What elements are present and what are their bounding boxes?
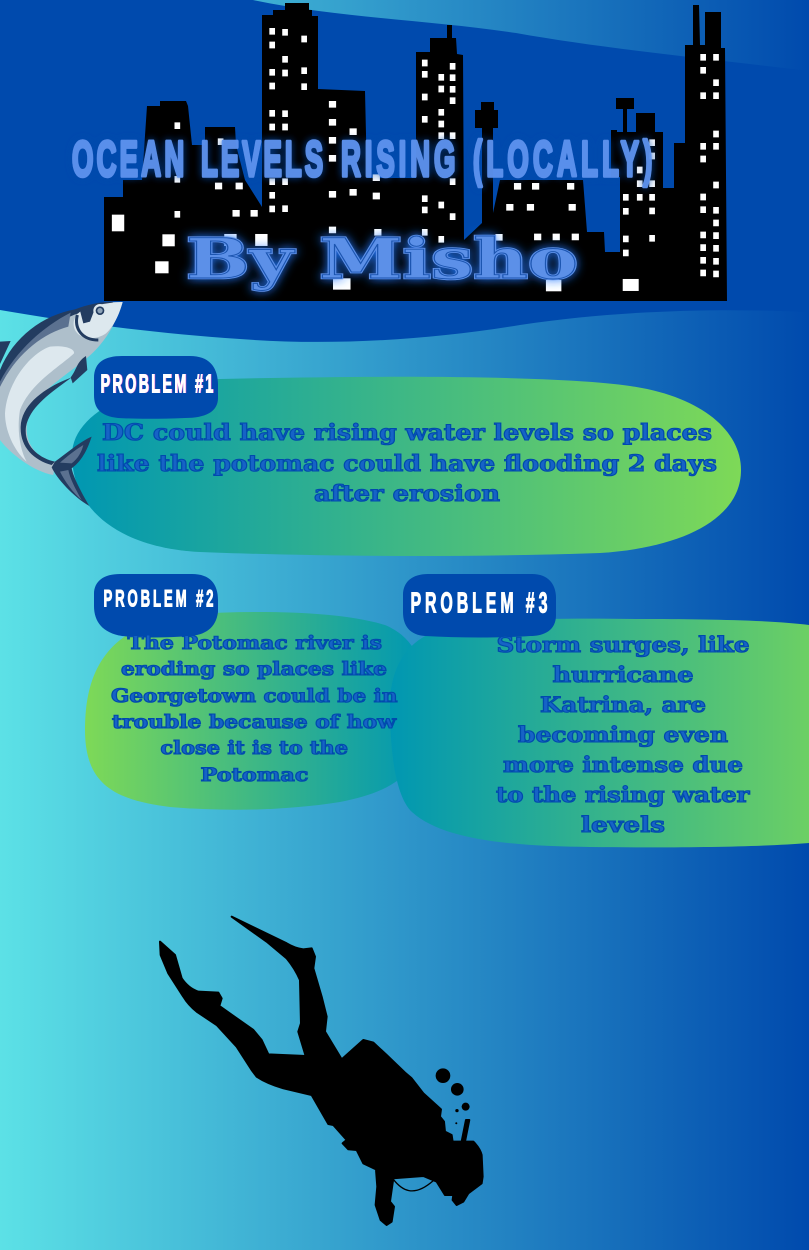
panel: problem 2 blob — [85, 612, 425, 810]
badge: problem 2: PROBLEM #2 — [104, 585, 214, 613]
badge: problem 3 — [403, 574, 556, 638]
badge: problem 3: PROBLEM #3 — [410, 586, 547, 619]
text: problem 2 description: trouble because of how — [112, 712, 397, 733]
panel: problem 1 blob — [72, 377, 741, 556]
text: problem 1 description: after erosion — [314, 481, 500, 507]
title: RISING — [341, 130, 455, 187]
text: problem 2 description: Georgetown could be in — [111, 686, 398, 707]
title — [72, 130, 652, 187]
background: dark blue sky wave — [0, 0, 809, 342]
building windows — [112, 28, 716, 291]
text: problem 1 description: like the potomac could have flooding 2 days — [97, 451, 717, 477]
text: problem 3 description — [496, 632, 751, 837]
icon: leaping fish — [0, 302, 123, 506]
badge: problem 2 — [94, 574, 218, 638]
text: problem 2 description: close it is to the — [160, 738, 348, 759]
title: OCEAN — [72, 130, 184, 187]
byline: By Misho — [186, 226, 578, 291]
text: problem 2 description: The Potomac river is — [128, 633, 382, 654]
text: problem 3 description: Katrina, are — [540, 692, 706, 717]
panel: problem 3 blob — [390, 619, 809, 847]
text: problem 3 description: becoming even — [518, 722, 728, 747]
badge: problem 1: PROBLEM #1 — [100, 370, 213, 399]
text: problem 3 description: hurricane — [552, 662, 694, 687]
badge: problem 1 — [94, 356, 218, 419]
text: problem 3 description: levels — [581, 812, 665, 837]
text: problem 2 description — [111, 633, 398, 786]
city skyline — [104, 3, 727, 301]
text: problem 2 description: Potomac — [200, 765, 308, 786]
text: problem 3 description: Storm surges, like — [496, 632, 750, 657]
title: (LOCALLY) — [473, 130, 652, 187]
text: problem 3 description: more intense due — [503, 752, 743, 777]
text: problem 3 description: to the rising water — [496, 782, 751, 807]
title: LEVELS — [201, 130, 323, 187]
text: problem 1 description: DC could have rising water levels so places — [102, 420, 712, 446]
text: problem 2 description: eroding so places like — [121, 659, 387, 680]
byline: By Misho — [186, 226, 578, 291]
text: problem 1 description — [97, 420, 717, 507]
icon: scuba diver silhouette — [160, 917, 483, 1225]
